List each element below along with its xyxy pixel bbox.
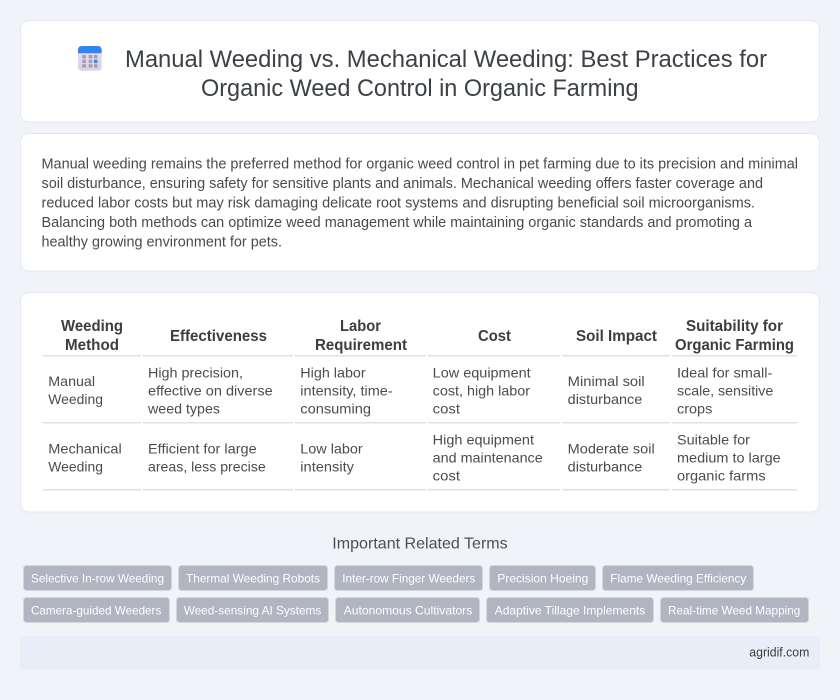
text block: introduction paragraph: healthy growing environment for pets.: [42, 233, 282, 250]
tag: autonomous cultivators: [336, 598, 480, 622]
table header row: Method: [65, 337, 119, 354]
table row: mechanical weeding: organic farms: [677, 467, 766, 483]
tag: inter-row finger weeders: [334, 566, 482, 590]
table row: manual weeding: High precision,: [148, 364, 243, 380]
title: Manual Weeding vs. Mechanical Weeding: Best Practices for: [125, 46, 767, 73]
tag: weed-sensing ai systems: Weed-sensing AI Systems: [184, 603, 321, 617]
table header row: [61, 318, 794, 354]
text block: introduction paragraph: Balancing both methods can optimize weed management while maintaining organic standards and promoting a: [42, 214, 753, 231]
tag: flame weeding efficiency: [602, 566, 754, 590]
table header row: Soil Impact: [576, 328, 658, 345]
table row: manual weeding: High labor: [300, 364, 366, 380]
table row: manual weeding: Manual: [48, 373, 95, 389]
table row: mechanical weeding: Mechanical: [48, 440, 122, 456]
table header row: Weeding: [61, 318, 123, 335]
text block: introduction paragraph: soil disturbance, ensuring safety for sensitive plants and animals. Mechanical weeding offers faster coverage and: [42, 175, 763, 192]
tag: flame weeding efficiency: Flame Weeding Efficiency: [610, 571, 746, 585]
table row: manual weeding: scale, sensitive: [677, 382, 774, 398]
tag: camera-guided weeders: [24, 598, 170, 622]
table row: manual weeding: weed types: [147, 400, 220, 416]
tag: inter-row finger weeders: Inter-row Finger Weeders: [342, 571, 475, 585]
table row: manual weeding: cost: [433, 400, 460, 416]
tag: weed-sensing ai systems: [176, 598, 328, 622]
panel: comparison table: [20, 292, 820, 512]
table row: manual weeding: Minimal soil: [568, 373, 645, 389]
table row: mechanical weeding: Low labor: [300, 440, 363, 456]
table row: manual weeding: disturbance: [568, 391, 643, 407]
table row: manual weeding: intensity, time-: [300, 382, 393, 398]
table row: manual weeding: cost, high labor: [433, 382, 530, 398]
text block: introduction paragraph: [42, 155, 798, 250]
table row: mechanical weeding: Weeding: [48, 458, 103, 474]
table row: mechanical weeding: medium to large: [677, 449, 781, 465]
table row: manual weeding: [48, 364, 774, 416]
icon: calendar: [78, 46, 102, 71]
tag: adaptive tillage implements: Adaptive Tillage Implements: [495, 603, 645, 617]
table header row: Effectiveness: [170, 328, 267, 345]
table row: mechanical weeding: [48, 431, 781, 483]
footer source text: agridif.com: [749, 645, 809, 660]
tag: selective in-row weeding: Selective In-row Weeding: [31, 571, 164, 585]
tag: adaptive tillage implements: [486, 598, 654, 622]
tag: real-time weed mapping: [660, 598, 808, 622]
table header row: Cost: [478, 328, 512, 345]
panel: header: [20, 20, 820, 122]
footer bar: [20, 636, 820, 670]
tag: thermal weeding robots: [178, 566, 328, 590]
tag: real-time weed mapping: Real-time Weed Mapping: [668, 603, 800, 617]
table row: manual weeding: consuming: [300, 400, 371, 416]
table row: manual weeding: Weeding: [48, 391, 103, 407]
title: Organic Weed Control in Organic Farming: [201, 75, 638, 102]
table row: manual weeding: crops: [677, 400, 712, 416]
table header row: Organic Farming: [675, 337, 794, 354]
table row: mechanical weeding: Suitable for: [677, 431, 750, 447]
tag: precision hoeing: [490, 566, 596, 590]
tag: camera-guided weeders: Camera-guided Weeders: [31, 603, 161, 617]
table row: mechanical weeding: High equipment: [433, 431, 534, 447]
heading: important related terms: Important Related Terms: [332, 535, 508, 552]
table row: manual weeding: effective on diverse: [148, 382, 273, 398]
table header row: Requirement: [315, 337, 408, 354]
tag: thermal weeding robots: Thermal Weeding Robots: [186, 571, 320, 585]
table row: mechanical weeding: Efficient for large: [148, 440, 257, 456]
panel: related term tags: [24, 566, 808, 622]
table row: mechanical weeding: disturbance: [568, 458, 643, 474]
text block: introduction paragraph: Manual weeding remains the preferred method for organic weed control in pet farming due to its precision and minimal: [42, 155, 798, 172]
table row: mechanical weeding: intensity: [300, 458, 354, 474]
table row: mechanical weeding: and maintenance: [433, 449, 543, 465]
table row: manual weeding: Ideal for small-: [677, 364, 773, 380]
table row: mechanical weeding: cost: [433, 467, 460, 483]
table header row: Suitability for: [686, 318, 783, 335]
table header row: Labor: [340, 318, 381, 335]
tag: autonomous cultivators: Autonomous Cultivators: [344, 603, 472, 617]
table row: manual weeding: Low equipment: [433, 364, 531, 380]
tag: selective in-row weeding: [24, 566, 172, 590]
panel: introduction: [20, 134, 820, 271]
table row: mechanical weeding: Moderate soil: [568, 440, 655, 456]
tag: precision hoeing: Precision Hoeing: [497, 571, 588, 585]
text block: introduction paragraph: reduced labor costs but may risk damaging delicate root systems and disrupting beneficial soil microorganisms.: [42, 194, 755, 211]
title: [125, 46, 767, 102]
table row: mechanical weeding: areas, less precise: [148, 458, 266, 474]
